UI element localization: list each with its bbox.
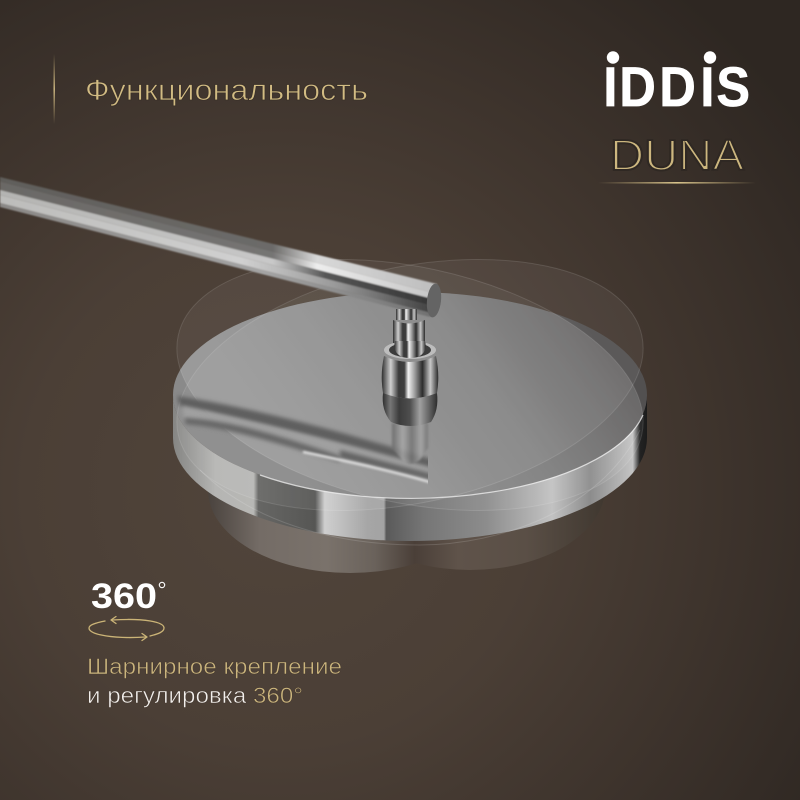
disc top surface bbox=[173, 292, 647, 498]
ball rim bbox=[384, 341, 436, 359]
rotation badge bbox=[89, 577, 165, 640]
brand logo: IDDIS bbox=[603, 57, 750, 119]
joint reflection bbox=[392, 423, 428, 464]
series name: DUNA bbox=[610, 131, 745, 180]
lower ghost shadows bbox=[208, 406, 605, 573]
degree ring bbox=[159, 582, 165, 588]
neck bbox=[396, 309, 417, 320]
lower body bbox=[383, 393, 437, 426]
disc rim highlight bbox=[260, 415, 643, 498]
ball bbox=[394, 341, 426, 358]
upper body bbox=[382, 356, 438, 398]
caption line two: и регулировка 360° bbox=[87, 683, 303, 708]
swivel joint bbox=[382, 309, 438, 426]
heading: Функциональность bbox=[85, 74, 368, 107]
series underline bbox=[598, 182, 756, 184]
ball socket bbox=[389, 342, 431, 358]
arm reflection on disc bbox=[177, 396, 440, 485]
rotated ghost discs bbox=[154, 220, 666, 550]
product illustration bbox=[0, 177, 666, 573]
collar bbox=[393, 320, 425, 346]
icon: rotation arrows bbox=[89, 616, 164, 640]
arm bbox=[0, 177, 437, 317]
caption bbox=[87, 654, 342, 708]
caption line one: Шарнирное крепление bbox=[87, 654, 342, 679]
ghost disc band edges bbox=[200, 430, 640, 545]
disc side band bbox=[173, 395, 647, 541]
inner lighter ghost on surface bbox=[180, 293, 642, 498]
heading divider line bbox=[54, 54, 55, 124]
arm end cap bbox=[425, 283, 443, 318]
360 number: 360 bbox=[91, 577, 157, 616]
